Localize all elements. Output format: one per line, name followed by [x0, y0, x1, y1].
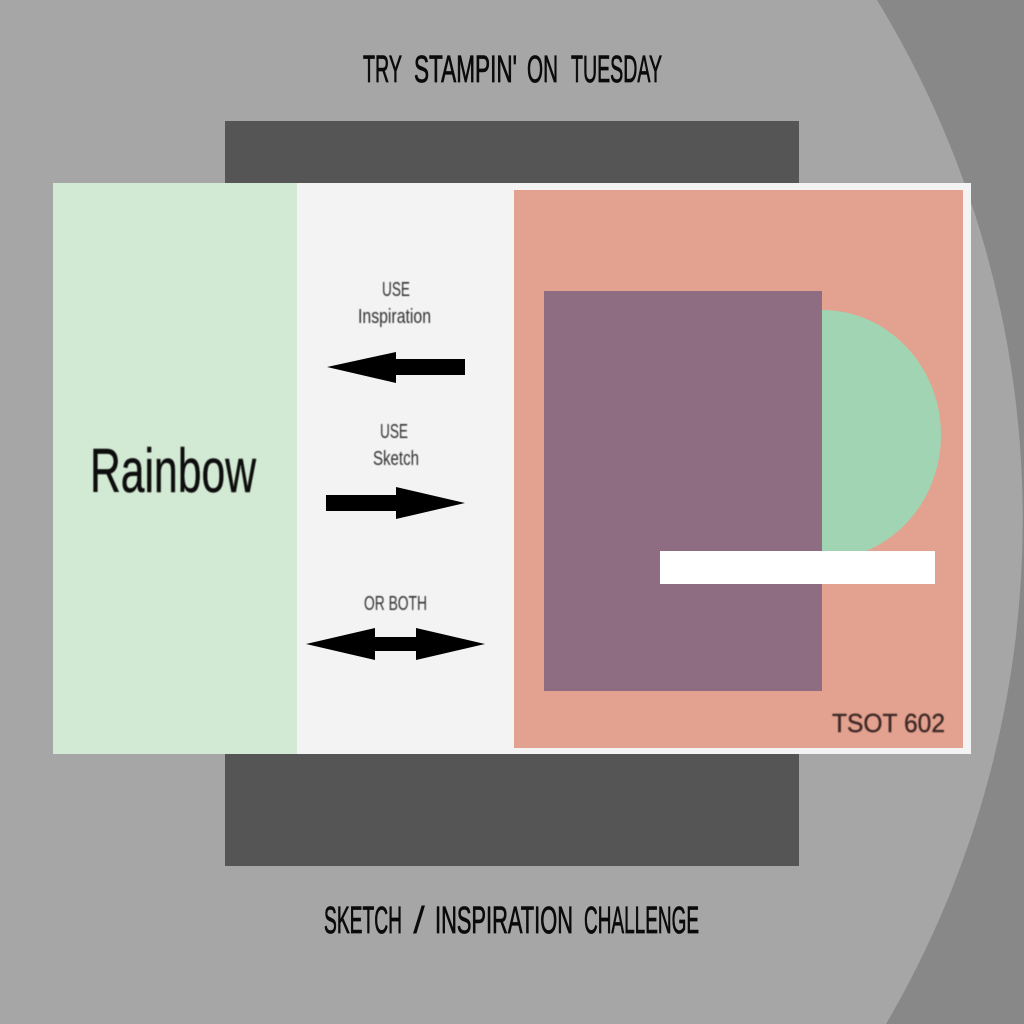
subtitle: INSPIRATION [435, 900, 573, 942]
label: use inspiration [358, 279, 431, 328]
theme background [53, 183, 297, 754]
sketch background [514, 190, 963, 748]
label: use sketch: Sketch [373, 448, 419, 470]
sketch: purple rectangle [544, 291, 822, 691]
label: use sketch: USE [380, 421, 408, 443]
panel: instructions [306, 279, 485, 660]
dark backing rectangle [225, 121, 799, 866]
subtitle [324, 900, 699, 942]
arrow: left [327, 352, 465, 383]
arrow: double-headed [306, 628, 485, 660]
title [363, 49, 662, 91]
sketch: white banner [660, 551, 935, 584]
title: TUESDAY [571, 49, 662, 91]
subtitle: SKETCH [324, 900, 402, 942]
sketch: green semicircle [822, 310, 941, 560]
label: or both: OR BOTH [364, 593, 427, 615]
card background [53, 183, 971, 754]
label: use sketch [373, 421, 419, 470]
subtitle: / [413, 900, 425, 942]
panel: sketch [514, 190, 963, 748]
panel: theme [53, 183, 297, 754]
label: use inspiration: USE [382, 279, 410, 301]
title: ON [527, 49, 558, 91]
theme word: Rainbow [90, 437, 256, 506]
arrow: right [326, 487, 465, 519]
panel: challenge card [53, 183, 971, 754]
title: TRY [363, 49, 402, 91]
title: STAMPIN' [414, 49, 517, 91]
label: use inspiration: Inspiration [358, 306, 431, 328]
infographic canvas: CHALLENGE [584, 900, 699, 942]
sketch number: TSOT 602 [832, 708, 945, 738]
